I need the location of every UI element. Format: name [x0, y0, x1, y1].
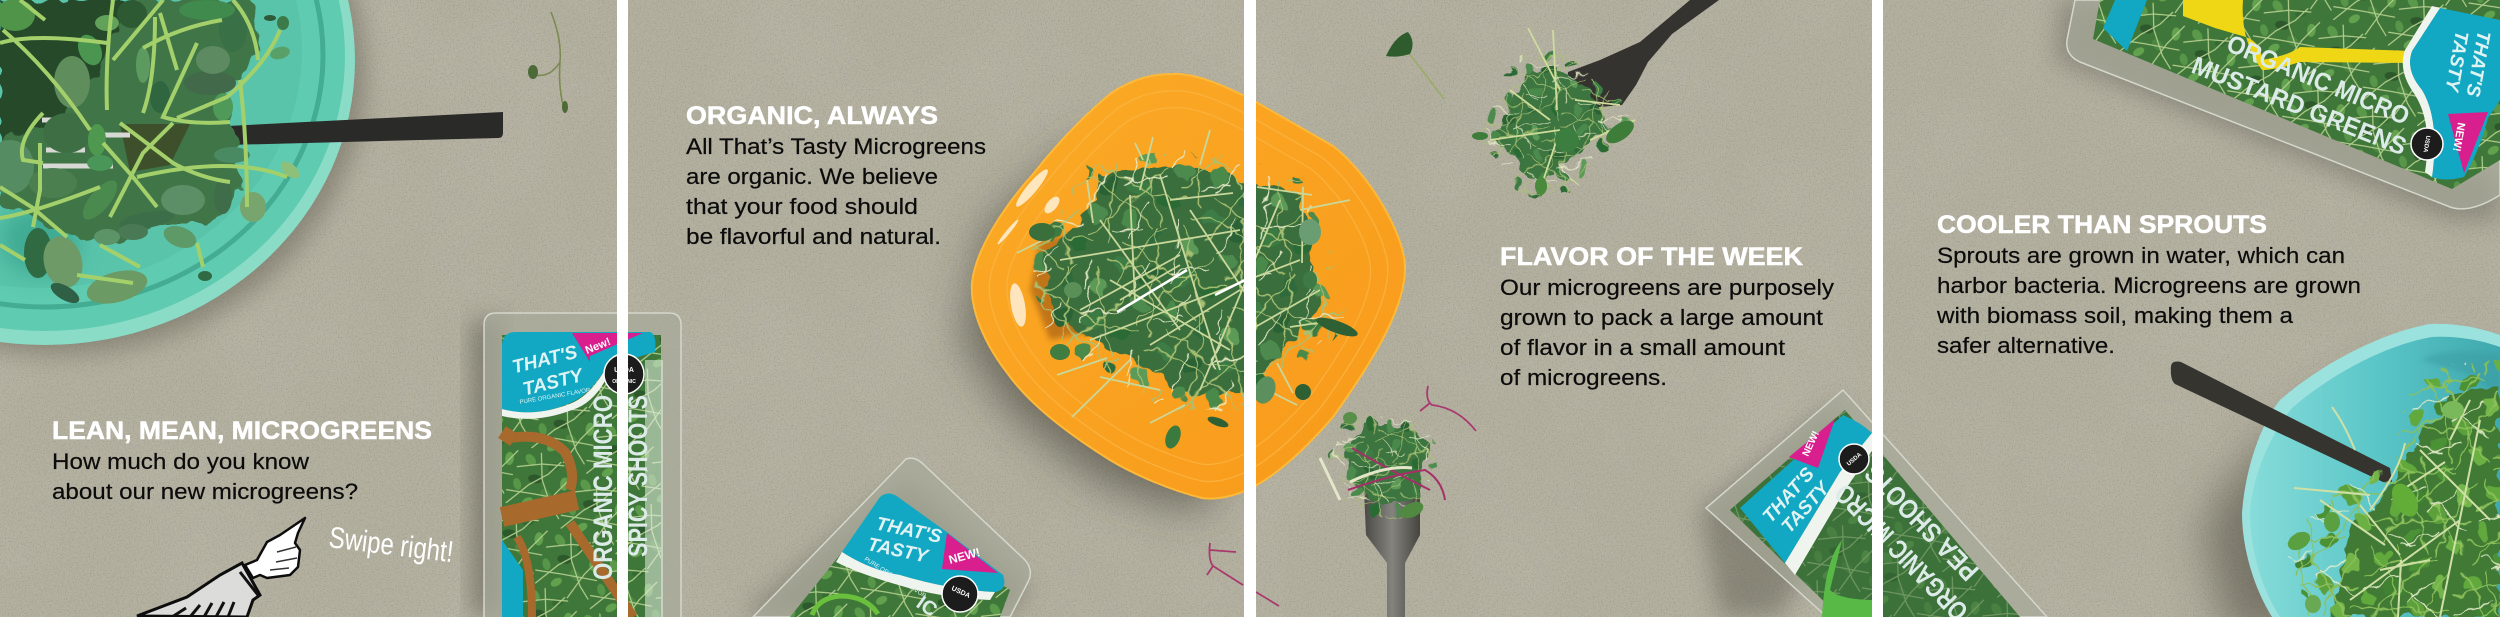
blue label accent	[502, 540, 523, 617]
text block: flavor of the week	[1500, 243, 1834, 390]
panel: teal plate with pea shoots	[0, 0, 503, 354]
greens clump	[1320, 412, 1445, 522]
body: harbor bacteria. Microgreens are grown	[1937, 273, 2361, 298]
logo: TASTY	[521, 365, 587, 400]
stems	[0, 0, 287, 283]
microgreens	[2285, 360, 2500, 617]
new flag	[572, 333, 643, 362]
body: All That’s Tasty Microgreens	[686, 134, 986, 159]
new flag	[2448, 112, 2488, 173]
green swirl	[812, 596, 878, 615]
magenta sprout	[1420, 386, 1476, 431]
fork	[1565, 0, 1719, 110]
spoon handle	[2171, 362, 2392, 483]
green mass	[0, 0, 262, 240]
plate rings	[989, 91, 1388, 481]
product name: MUSTARD GREENS	[2188, 52, 2410, 161]
microgreens pile	[1017, 130, 1360, 451]
body: of microgreens.	[1500, 365, 1667, 390]
greens	[790, 500, 1010, 617]
panel: blue bowl with microgreens	[2171, 324, 2500, 617]
body	[1500, 275, 1834, 390]
body: that your food should	[686, 194, 918, 219]
plate highlights	[996, 166, 1062, 328]
greens	[1730, 410, 2020, 617]
usda seal: ORGANIC	[612, 379, 636, 385]
pea shoot pile	[0, 0, 302, 310]
usda seal: USDA	[950, 585, 971, 600]
text block: organic always	[686, 102, 986, 249]
product name: PEA SHOOTS	[1859, 458, 1985, 587]
heading: LEAN, MEAN, MICROGREENS	[52, 417, 432, 445]
small magenta sprout	[1207, 543, 1279, 606]
fork head	[120, 124, 190, 172]
logo: THAT'S	[874, 514, 944, 548]
logo: THAT'S	[2461, 29, 2494, 99]
teal label	[1740, 415, 1872, 563]
product name: SPICY SHOOTS	[623, 395, 653, 557]
brown pot drawing	[502, 432, 633, 617]
small teal tab	[2103, 0, 2147, 51]
new flag	[942, 533, 998, 573]
greens	[2093, 0, 2500, 189]
logo: PURE ORGANIC FLAVOR	[519, 388, 591, 406]
fork tines	[42, 120, 130, 166]
hand	[245, 518, 305, 578]
clear tray	[484, 313, 681, 617]
body	[686, 134, 986, 249]
body: Our microgreens are purposely	[1500, 275, 1834, 300]
new flag: NEW!	[1801, 429, 1822, 458]
body: with biomass soil, making them a	[1936, 303, 2294, 328]
heading: COOLER THAN SPROUTS	[1937, 211, 2267, 239]
new flag: New!	[584, 336, 612, 357]
body: How much do you know	[52, 449, 309, 474]
panel: fork with greens bottom	[1320, 412, 1445, 617]
clear tray	[1706, 390, 2047, 617]
loose leaves	[1029, 219, 1360, 451]
usda seal: USDA	[1846, 452, 1864, 468]
package: spicy shoots	[472, 313, 681, 617]
teal label	[2410, 8, 2500, 180]
orange plate	[972, 74, 1405, 499]
usda seal	[2411, 128, 2443, 160]
clear tray	[2067, 0, 2500, 209]
product name	[588, 395, 653, 580]
panel: fork with greens top	[1472, 0, 1719, 200]
body: of flavor in a small amount	[1500, 335, 1785, 360]
usda seal: USDA	[614, 367, 634, 374]
icon: small sprout top	[528, 12, 568, 113]
teal label	[502, 332, 655, 412]
body: about our new microgreens?	[52, 479, 358, 504]
blue bowl	[2242, 324, 2500, 617]
clear tray	[753, 458, 1030, 617]
new flag	[1789, 419, 1835, 468]
heading: FLAVOR OF THE WEEK	[1500, 243, 1803, 271]
greens	[502, 335, 661, 617]
package: pea shoots	[1700, 390, 2047, 617]
icon: seedling leaf	[1386, 32, 1444, 99]
package: bottom center	[740, 458, 1031, 617]
logo: THAT'S	[510, 342, 580, 378]
usda seal: USDA	[2421, 135, 2430, 153]
sleeve	[137, 563, 260, 617]
logo: TASTY	[866, 534, 932, 568]
logo: TASTY	[1778, 476, 1836, 538]
swipe right note: Swipe right!	[327, 521, 455, 569]
new flag: NEW!	[2450, 121, 2467, 152]
product name: ORGANIC MICRO	[2223, 30, 2413, 131]
new flag: NEW!	[947, 545, 982, 567]
body: Sprouts are grown in water, which can	[1937, 243, 2345, 268]
product name: ORGANIC MICRO	[588, 395, 618, 580]
logo	[2440, 29, 2494, 99]
body: are organic. We believe	[686, 164, 938, 189]
body	[1936, 243, 2361, 358]
body	[52, 449, 358, 504]
usda seal	[1839, 444, 1869, 474]
logo	[510, 342, 591, 406]
white panel dividers	[617, 0, 1883, 617]
green swoosh	[1822, 540, 1880, 617]
teal plate	[0, 0, 355, 345]
greens clump	[1472, 28, 1638, 200]
body: be flavorful and natural.	[686, 224, 941, 249]
fork	[1364, 490, 1420, 617]
logo: THAT'S	[1759, 464, 1819, 527]
usda seal	[942, 576, 978, 612]
panel: orange plate with microgreens	[961, 74, 1405, 513]
leaves	[0, 0, 302, 310]
icon: pointing hand	[137, 518, 305, 617]
fork handle in plate	[188, 112, 503, 146]
usda seal	[604, 354, 644, 394]
package: mustard greens	[2055, 0, 2500, 220]
logo: TASTY	[2440, 29, 2472, 95]
white edge	[2403, 6, 2440, 177]
heading: ORGANIC, ALWAYS	[686, 102, 938, 130]
logo	[863, 514, 944, 600]
body: safer alternative.	[1937, 333, 2115, 358]
text block: cooler than sprouts	[1936, 211, 2361, 358]
logo	[1759, 464, 1836, 538]
body: grown to pack a large amount	[1500, 305, 1823, 330]
teal label	[842, 494, 1004, 592]
pile shadow on plate	[1030, 230, 1100, 340]
logo: PURE ORGANIC FLAVOR	[863, 557, 927, 600]
yellow drawing	[2183, 0, 2412, 70]
text block: lean mean microgreens	[52, 417, 432, 504]
